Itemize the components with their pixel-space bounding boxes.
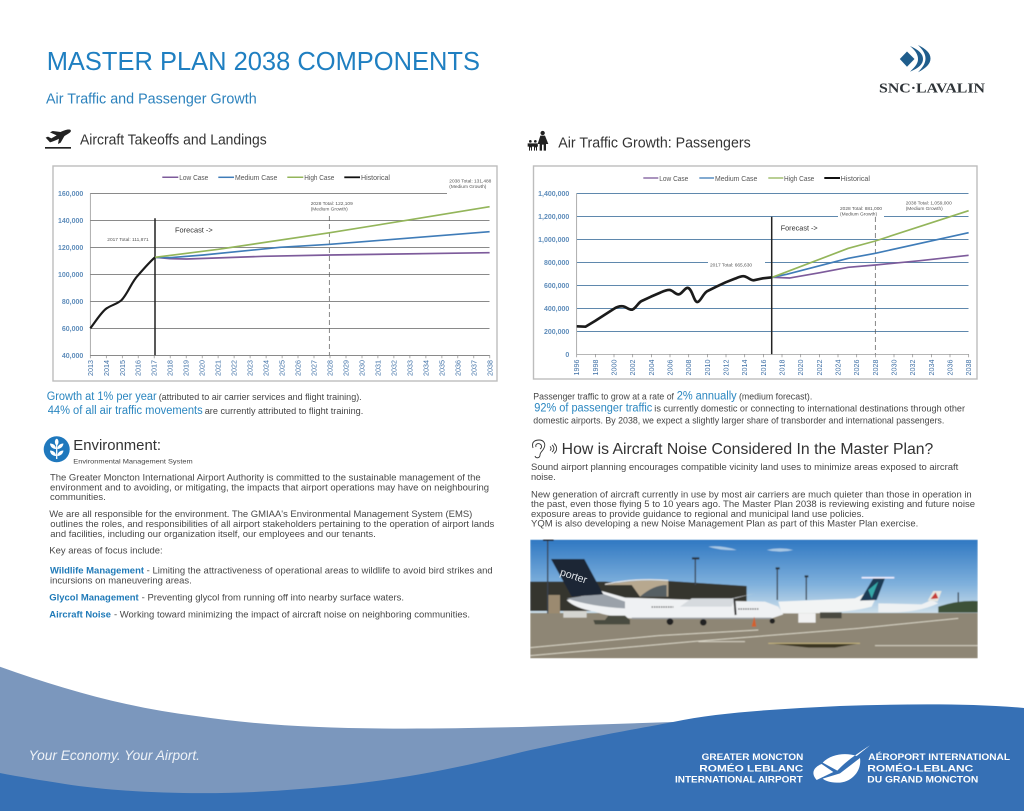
logo: SNC-Lavalin: [879, 45, 985, 96]
annotations: 2038 Total: 131,488: [449, 179, 492, 185]
x axis year labels: 2021: [214, 360, 223, 376]
air canada aircraft: [878, 600, 938, 612]
x axis year labels: 2038: [964, 360, 973, 376]
x axis year labels: 2029: [342, 360, 350, 376]
x axis year labels: 2014: [102, 360, 111, 376]
y axis labels: [538, 191, 569, 359]
x axis year labels: 2024: [262, 360, 271, 376]
x axis year labels: 2036: [453, 360, 462, 376]
x axis year labels: 2013: [86, 360, 95, 376]
x axis year labels: 2031: [373, 360, 382, 376]
westjet aircraft: [778, 593, 875, 613]
text block: aircraft noise body: the past, even those flying 5 to 10 years ago. The Master Plan 2038 is reviewing existing and future noise: [531, 499, 975, 509]
heading: air traffic growth passengers: Air Traffic Growth: Passengers: [558, 134, 751, 151]
x axis year labels: 2004: [647, 360, 656, 376]
text block: passenger growth notes: [533, 390, 966, 426]
x axis year labels: 2020: [796, 360, 805, 376]
x axis year labels: 2026: [294, 360, 302, 376]
x axis year labels: 2033: [405, 360, 414, 376]
y axis labels: 140,000: [58, 218, 83, 225]
legend: Historical: [841, 176, 870, 183]
porter aircraft: [567, 591, 783, 618]
text block: aircraft growth notes: [47, 391, 363, 417]
text block: passenger growth notes: 92% of passenger traffic: [534, 403, 653, 415]
logo: SNC-Lavalin: SNC·LAVALIN: [879, 81, 985, 96]
footer: French airport name: DU GRAND MONCTON: [867, 775, 978, 786]
text block: passenger growth notes: (medium forecast).: [739, 391, 812, 402]
x axis year labels: 2027: [310, 360, 318, 376]
light poles: [548, 540, 958, 613]
text block: environment body: Aircraft Noise: [49, 609, 111, 619]
x axis year labels: 2016: [759, 360, 768, 376]
annotations: [107, 179, 492, 243]
legend: High Case: [784, 176, 814, 183]
x axis year labels: 1998: [591, 360, 600, 376]
y axis labels: 80,000: [62, 299, 83, 306]
text block: environment body: We are all responsible for the environment. The GMIAA's Environmental Management System (EMS): [49, 509, 472, 519]
line chart: aircraft takeoffs and landings: [53, 166, 497, 381]
legend: Historical: [361, 175, 390, 182]
x axis year labels: [572, 360, 973, 376]
y axis labels: 200,000: [544, 329, 569, 336]
text block: aircraft noise body: New generation of aircraft currently in use by most air carriers are much quieter than those in operation in: [531, 489, 972, 499]
apron markings: [530, 618, 978, 656]
x axis year labels: 2024: [834, 360, 842, 376]
x axis year labels: 2032: [908, 360, 917, 376]
annotations: 2028 Total: 122,109: [311, 201, 353, 207]
text block: environment body: communities.: [50, 492, 106, 502]
x axis year labels: 2010: [703, 360, 712, 376]
text block: environment body: Wildlife Management: [50, 566, 144, 576]
footer: French airport name: [867, 752, 1010, 786]
photo: aircraft on the apron: [530, 540, 978, 658]
annotations: 2028 Total: 881,000: [840, 206, 882, 212]
text block: environment body: - Limiting the attractiveness of operational areas to wildlife to avoid bird strikes and: [147, 566, 493, 576]
footer tagline: Your Economy. Your Airport.: [29, 748, 200, 763]
x axis year labels: [86, 360, 494, 376]
x axis year labels: 2037: [469, 360, 478, 376]
text block: environment body: - Working toward minimizing the impact of aircraft noise on neighboring communities.: [114, 609, 470, 619]
y axis labels: 800,000: [544, 260, 569, 267]
annotations: Forecast ->: [781, 224, 818, 233]
x axis year labels: 2034: [421, 360, 430, 376]
annotations: (Medium Growth): [840, 211, 877, 217]
text block: environment body: outlines the roles, and responsibilities of all airport stakeholders pertaining to the operation of airport lands: [50, 519, 495, 529]
x axis year labels: 2016: [134, 360, 143, 376]
text block: environment body: Key areas of focus include:: [49, 546, 163, 556]
annotations: (Medium Growth): [311, 206, 348, 212]
x axis year labels: 2020: [198, 360, 207, 376]
y axis labels: [58, 191, 83, 360]
x axis year labels: 2032: [389, 360, 398, 376]
footer: English airport name: INTERNATIONAL AIRPORT: [675, 775, 803, 786]
icon: family of passengers: [528, 131, 548, 151]
legend: High Case: [304, 175, 334, 182]
x axis year labels: 2026: [852, 360, 861, 376]
x axis year labels: 2030: [358, 360, 366, 376]
x axis year labels: 2036: [946, 360, 954, 376]
y axis labels: 1,200,000: [538, 214, 569, 221]
text block: environment body: and facilities, including our organization itself, our employees and our tenants.: [50, 529, 376, 539]
text block: passenger growth notes: 2% annually: [677, 390, 737, 402]
x axis year labels: 2025: [278, 360, 287, 376]
annotations: (Medium Growth): [449, 184, 487, 190]
porter tail wordmark: porter: [558, 566, 589, 587]
forecast divider lines: [155, 216, 329, 355]
legend: [643, 176, 870, 183]
x axis year labels: 2015: [118, 360, 127, 376]
annotations: 2017 Total: 665,630: [710, 263, 752, 269]
subheading: environmental management system: Environmental Management System: [73, 458, 193, 465]
legend: Low Case: [179, 175, 208, 182]
x axis year labels: 2018: [778, 360, 786, 376]
legend: Low Case: [659, 176, 688, 183]
text block: environment body: incursions on maneuvering areas.: [50, 576, 192, 586]
text block: passenger growth notes: Passenger traffic to grow at a rate of: [533, 391, 674, 402]
text block: aircraft noise body: YQM is also developing a new Noise Management Plan as part of this Master Plan exercise.: [531, 519, 918, 529]
footer: French airport name: ROMÉO-LEBLANC: [867, 764, 973, 775]
x axis year labels: 2002: [628, 360, 637, 376]
x axis year labels: 2022: [230, 360, 239, 376]
x axis year labels: 2023: [246, 360, 255, 376]
annotations: (Medium Growth): [906, 206, 943, 212]
text block: environment body: environment and to avoiding, or mitigating, the impacts that airport operations may have on neighbouring: [50, 482, 489, 492]
heading: aircraft noise: How is Aircraft Noise Considered In the Master Plan?: [562, 441, 934, 458]
text block: environment body: [49, 472, 495, 619]
footer: French airport name: AÉROPORT INTERNATIONAL: [868, 752, 1010, 763]
text block: passenger growth notes: domestic airports. By 2038, we expect a slightly larger share of transborder and international passengers.: [533, 415, 944, 426]
x axis year labels: 2012: [722, 360, 730, 376]
x axis year labels: 2019: [182, 360, 191, 376]
annotations: [710, 200, 952, 269]
x axis year labels: 2022: [815, 360, 824, 376]
text block: aircraft noise body: [531, 462, 975, 529]
y axis labels: 40,000: [62, 353, 83, 360]
footer: English airport name: [675, 752, 803, 786]
footer: dark blue wave: [0, 704, 1024, 811]
text block: environment body: - Preventing glycol from running off into nearby surface waters.: [142, 593, 404, 603]
icon: ear with sound waves: [533, 440, 557, 458]
footer: light swoosh: [0, 667, 700, 811]
data series lines: [90, 207, 490, 328]
annotations: 2038 Total: 1,059,000: [906, 200, 952, 206]
annotations: Forecast ->: [175, 226, 213, 235]
y axis labels: 400,000: [544, 306, 569, 313]
y axis labels: 160,000: [58, 191, 83, 198]
text block: passenger growth notes: is currently domestic or connecting to international destinations through other: [654, 404, 966, 415]
x axis year labels: 2008: [684, 360, 693, 376]
footer: airport bird logo: [813, 745, 870, 783]
icon: aircraft taking off: [45, 130, 71, 149]
x axis year labels: 2017: [150, 360, 159, 376]
tree line: [938, 601, 978, 613]
footer: English airport name: ROMÉO LEBLANC: [699, 764, 803, 775]
y axis labels: 0: [565, 352, 569, 359]
x axis year labels: 2018: [166, 360, 175, 376]
x axis year labels: 1996: [572, 360, 581, 376]
text block: aircraft noise body: Sound airport planning encourages compatible vicinity land uses to minimize areas exposed to aircraft: [531, 462, 959, 472]
heading: aircraft takeoffs and landings: Aircraft Takeoffs and Landings: [80, 132, 267, 148]
legend: Medium Case: [235, 175, 277, 182]
text block: aircraft growth notes: (attributed to air carrier services and flight training).: [159, 392, 362, 403]
y axis labels: 60,000: [62, 326, 83, 333]
line chart: passenger growth: [534, 166, 977, 379]
annotations: 2017 Total: 111,871: [107, 237, 149, 243]
x axis year labels: 2014: [740, 360, 749, 376]
y axis labels: 1,000,000: [538, 237, 569, 244]
icon: environment leaf: [44, 436, 70, 462]
x axis year labels: 2000: [610, 360, 618, 376]
title: MASTER PLAN 2038 COMPONENTS: [47, 48, 480, 76]
data series lines: [577, 211, 969, 327]
legend: [162, 175, 390, 182]
text block: aircraft growth notes: Growth at 1% per year: [47, 391, 157, 403]
x axis year labels: 2038: [485, 360, 494, 376]
subtitle: Air Traffic and Passenger Growth: [46, 91, 257, 107]
text block: aircraft growth notes: are currently attributed to flight training.: [205, 406, 363, 417]
text block: aircraft growth notes: 44% of all air traffic movements: [48, 405, 203, 417]
text block: aircraft noise body: noise.: [531, 472, 556, 482]
heading: environment: Environment:: [73, 437, 161, 454]
forecast divider lines: [772, 217, 875, 354]
x axis year labels: 2035: [437, 360, 446, 376]
y axis labels: 1,400,000: [538, 191, 569, 198]
x axis year labels: 2030: [890, 360, 898, 376]
x axis year labels: 2028: [326, 360, 334, 376]
y axis labels: 120,000: [58, 245, 83, 252]
footer: English airport name: GREATER MONCTON: [702, 752, 803, 763]
x axis year labels: 2034: [927, 360, 936, 376]
terminal: [530, 581, 747, 611]
text block: environment body: The Greater Moncton International Airport Authority is committed to the sustainable management of the: [50, 472, 481, 482]
y axis labels: 600,000: [544, 283, 569, 290]
text block: environment body: Glycol Management: [49, 593, 139, 603]
x axis year labels: 2028: [871, 360, 880, 376]
text block: aircraft noise body: exposure areas to provide guidance to regional and municipal land use policies.: [531, 509, 864, 519]
ground vehicles: [593, 616, 630, 624]
legend: Medium Case: [715, 176, 757, 183]
x axis year labels: 2006: [666, 360, 674, 376]
y axis labels: 100,000: [58, 272, 83, 279]
